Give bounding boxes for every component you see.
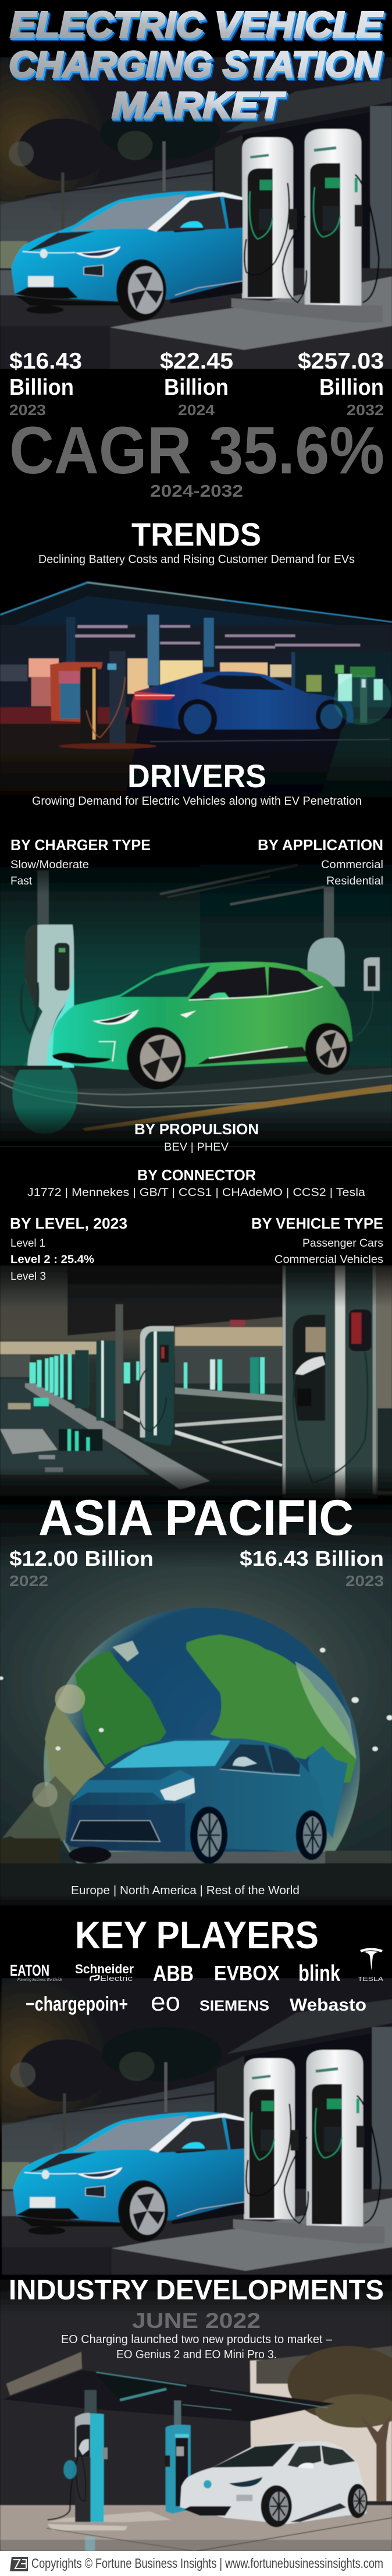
logo: eo: eo: [151, 1988, 180, 2016]
segment: by charger type: Slow/Moderate: [10, 858, 89, 871]
heading: BY LEVEL, 2023: [10, 1215, 127, 1232]
logo: schneider electric: [75, 1962, 134, 1983]
logo: schneider electric: Schneider: [75, 1962, 134, 1976]
company logos: [10, 1948, 383, 2016]
segment: by connector: [27, 1166, 365, 1199]
logo: tesla: TESLA: [358, 1976, 383, 1983]
scene: green car at wall chargers: [0, 850, 392, 1149]
segment: by application: Commercial: [321, 858, 383, 871]
key players heading: KEY PLAYERS: [75, 1913, 319, 1956]
asia pacific value 2023: [240, 1547, 384, 1590]
stat 2032: Billion: [319, 375, 384, 400]
segment: by application: Residential: [326, 875, 383, 887]
asia pacific value 2022: 2022: [9, 1572, 48, 1590]
trends description: Declining Battery Costs and Rising Customer Demand for EVs: [38, 553, 355, 566]
heading: BY APPLICATION: [258, 836, 383, 854]
title line 2: CHARGING STATION: [9, 44, 382, 85]
asia pacific value 2023: $16.43 Billion: [240, 1547, 384, 1570]
segment: by charger type: Fast: [10, 875, 33, 887]
scene: parking row of chargers: [0, 1266, 392, 1520]
segment: by level: Level 1: [10, 1237, 45, 1250]
asia pacific value 2022: $12.00 Billion: [9, 1547, 154, 1570]
stat 2024: $22.45: [160, 349, 233, 374]
segment: by charger type: [10, 836, 151, 887]
logo: siemens: SIEMENS: [199, 1998, 269, 2014]
title: [9, 5, 386, 129]
development description: EO Charging launched two new products to market –: [61, 2333, 333, 2346]
icon: fortune business insights logo: [10, 2557, 28, 2571]
development description: [61, 2333, 333, 2361]
market size stats: [9, 349, 384, 419]
title line 2: CHARGING STATION: [10, 46, 383, 87]
scene: white car and teal chargers under canopy: [0, 2275, 392, 2552]
stat 2024: Billion: [164, 375, 229, 400]
logo: tesla: [358, 1948, 383, 1983]
CAGR period: 2024-2032: [150, 482, 243, 501]
logo: abb: ABB: [153, 1962, 194, 1986]
stat 2032: $257.03: [298, 349, 384, 374]
asia pacific heading: ASIA PACIFIC: [38, 1490, 354, 1546]
title line 1: ELECTRIC VEHICLE: [10, 5, 383, 45]
title line 2: CHARGING STATION: [11, 47, 384, 88]
logo: schneider electric: Electric: [100, 1974, 133, 1983]
development description: EO Genius 2 and EO Mini Pro 3.: [116, 2348, 277, 2361]
title line 3: MARKET: [112, 85, 286, 126]
logo: eaton: Powering Business Worldwide: [17, 1978, 62, 1982]
title line 3: MARKET: [113, 87, 287, 128]
black segment band: [0, 1147, 392, 1266]
logo: chargepoint: −chargepoin+: [26, 1993, 128, 2015]
scene: night charging station with blue sedan: [0, 581, 392, 811]
trends heading: TRENDS: [131, 516, 261, 553]
scene: globe with blue car: [0, 1485, 392, 1958]
drivers description: Growing Demand for Electric Vehicles along with EV Penetration: [32, 795, 362, 808]
heading: BY VEHICLE TYPE: [251, 1215, 383, 1232]
logo: evbox: EVBOX: [214, 1961, 280, 1985]
drivers heading: DRIVERS: [127, 758, 266, 794]
black stats band: [0, 369, 392, 579]
segment: by vehicle type: Passenger Cars: [302, 1237, 383, 1250]
segment: by connector: J1772 | Mennekes | GB/T | CCS1 | CHAdeMO | CCS2 | Tesla: [27, 1186, 365, 1199]
stat 2023: 2023: [9, 401, 46, 419]
hero scene: blue car at charging station: [0, 54, 392, 369]
stat 2032: [298, 349, 384, 419]
stat 2024: 2024: [178, 401, 215, 419]
segment: by application: [258, 836, 383, 887]
stat 2023: [9, 349, 82, 419]
title line 3: MARKET: [114, 88, 288, 129]
logo: eaton: EATON: [10, 1962, 49, 1979]
black band over key players top: [0, 1909, 392, 1978]
segment: by level: [10, 1215, 127, 1283]
hero scene repeated under key players: [0, 1975, 392, 2290]
development date: JUNE 2022: [132, 2309, 261, 2333]
segment: by propulsion: [134, 1120, 259, 1153]
heading: BY CONNECTOR: [137, 1166, 256, 1184]
logo: blink: blink: [298, 1961, 340, 1986]
segment: by vehicle type: [251, 1215, 383, 1266]
stat 2032: 2032: [347, 401, 384, 419]
stat 2024: [160, 349, 233, 419]
heading: BY CHARGER TYPE: [10, 836, 151, 854]
heading: BY PROPULSION: [134, 1120, 259, 1138]
segment: by level: Level 3: [10, 1270, 46, 1283]
title line 1: ELECTRIC VEHICLE: [11, 6, 384, 47]
footer: [0, 2551, 392, 2576]
stat 2023: $16.43: [9, 349, 82, 374]
other regions: Europe | North America | Rest of the World: [71, 1884, 300, 1897]
stat 2023: Billion: [9, 375, 74, 400]
logo: webasto: Webasto: [290, 1995, 366, 2015]
asia pacific value 2023: 2023: [345, 1572, 384, 1590]
segment: by level: Level 2 : 25.4%: [10, 1253, 94, 1266]
segment: by propulsion: BEV | PHEV: [164, 1141, 229, 1153]
industry developments heading: INDUSTRY DEVELOPMENTS: [9, 2275, 384, 2306]
asia pacific value 2022: [9, 1547, 154, 1590]
segment: by vehicle type: Commercial Vehicles: [275, 1253, 383, 1266]
title line 1: ELECTRIC VEHICLE: [12, 8, 386, 48]
